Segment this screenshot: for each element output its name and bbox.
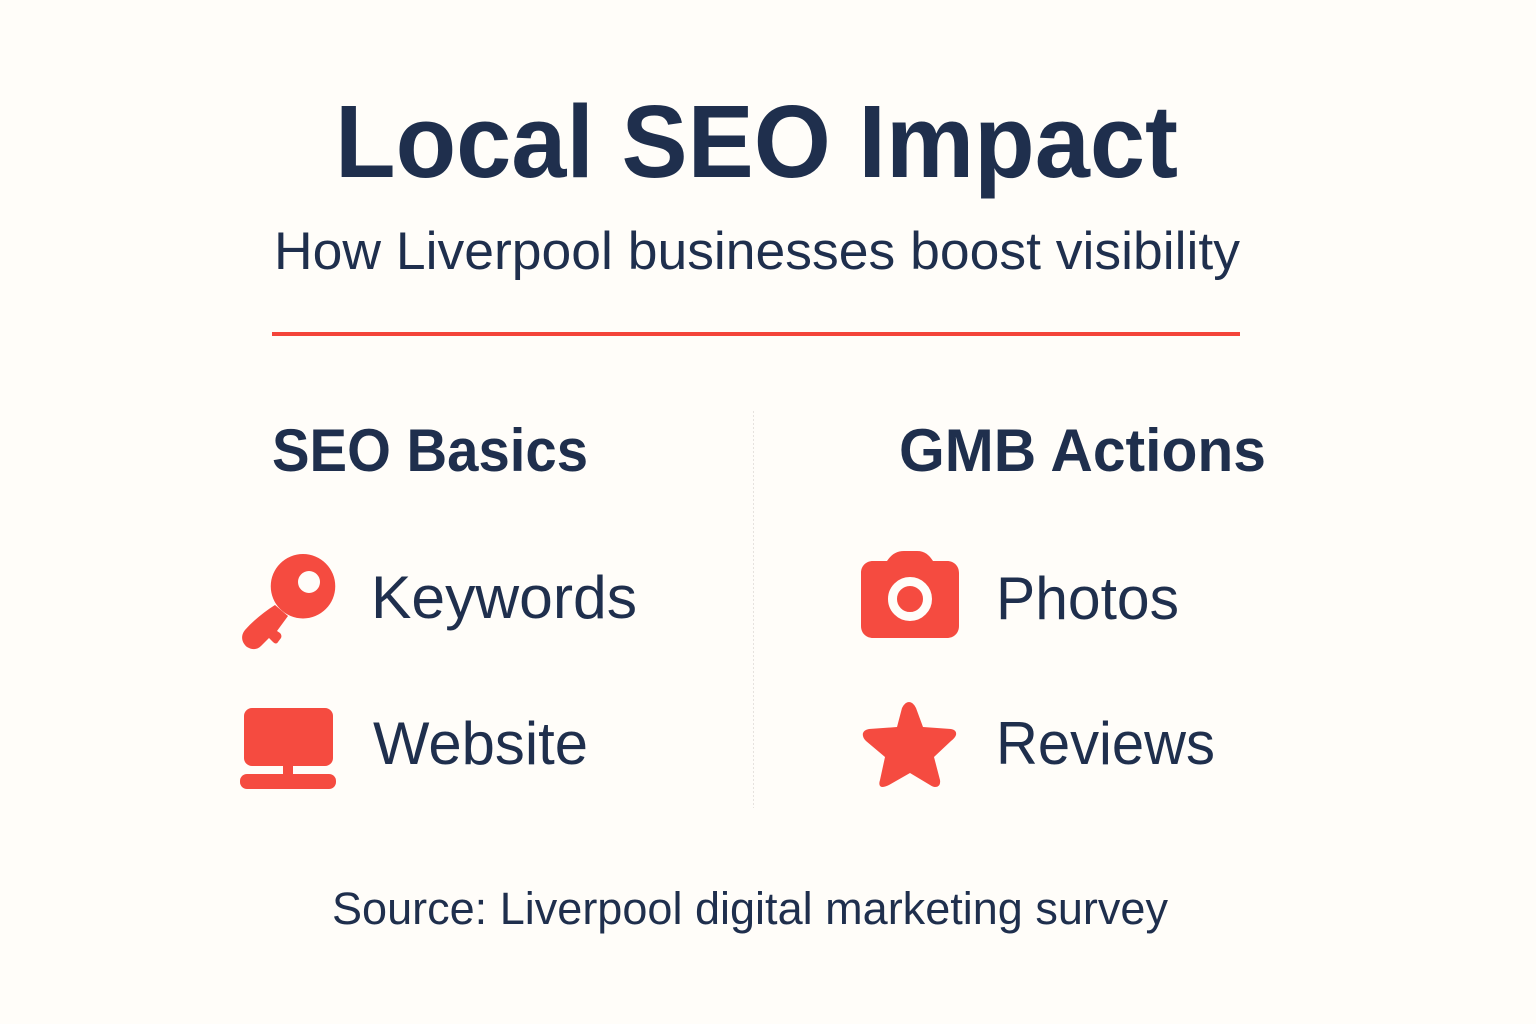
label: Reviews: Reviews bbox=[996, 710, 1215, 777]
heading: GMB Actions: GMB Actions bbox=[899, 417, 1266, 484]
icon: key bbox=[242, 554, 335, 649]
title: Local SEO Impact bbox=[335, 84, 1178, 199]
label: Keywords: Keywords bbox=[371, 564, 637, 631]
subtitle: How Liverpool businesses boost visibility bbox=[274, 222, 1241, 281]
icon: monitor bbox=[240, 708, 336, 789]
panel: GMB Actions bbox=[861, 417, 1266, 787]
label: Photos: Photos bbox=[996, 565, 1179, 632]
source note: Source: Liverpool digital marketing survey bbox=[332, 883, 1168, 934]
panel: SEO Basics bbox=[240, 417, 637, 789]
label: Website: Website bbox=[373, 710, 588, 777]
heading: SEO Basics: SEO Basics bbox=[272, 417, 588, 484]
icon: star bbox=[863, 702, 956, 787]
icon: camera bbox=[861, 551, 959, 638]
